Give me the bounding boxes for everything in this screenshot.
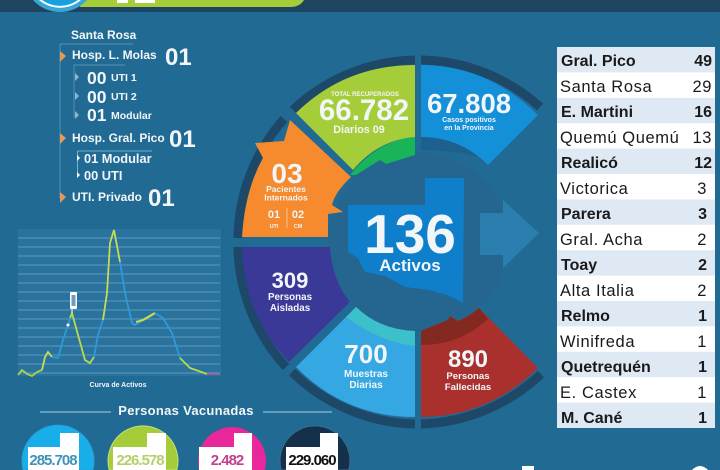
vaccine badge: 226.578: 226.578 (116, 452, 164, 469)
panel: personas aisladas (242, 247, 350, 362)
chart: curva de activos (18, 229, 221, 376)
table: casos por localidad: 2 (697, 282, 707, 300)
panel: pacientes internados: 02 (292, 209, 304, 221)
table: casos por localidad: Realicó (561, 155, 618, 172)
panel: hospital occupancy: 01 (148, 185, 175, 212)
panel: personas aisladas: 309 (272, 268, 308, 293)
vaccine badge: 2.482: 2.482 (211, 452, 244, 469)
panel: personas aisladas: Aisladas (270, 303, 311, 314)
panel: personas aisladas: Personas (268, 292, 313, 303)
table: casos por localidad: E. Martini (561, 104, 633, 121)
panel: muestras diarias: Diarias (349, 380, 383, 391)
panel: casos positivos (421, 65, 538, 165)
vaccine badge: 285.708 (22, 425, 94, 470)
panel: total recuperados: TOTAL RECUPERADOS (331, 92, 399, 98)
vaccine badge: 2.482 (198, 427, 266, 470)
panel: pacientes internados (242, 120, 351, 237)
vaccine badge: 229.060 (280, 426, 350, 470)
table: casos por localidad: Quetrequén (561, 359, 651, 376)
panel: pacientes internados: Internados (264, 192, 308, 202)
panel: hospital occupancy: UTI 1 (111, 72, 137, 84)
center map: activos: Activos (379, 256, 441, 275)
panel: pacientes internados: Pacientes (266, 184, 306, 194)
center map: activos: 136 (364, 203, 456, 265)
panel: casos positivos: 67.808 (427, 88, 511, 119)
table: casos por localidad: 12 (694, 155, 712, 172)
panel: hospital occupancy: 00 (87, 68, 107, 88)
header bar (0, 0, 720, 12)
table: casos por localidad: 49 (694, 53, 712, 70)
table: casos por localidad: 2 (698, 257, 707, 274)
ring: dark outer arcs (238, 60, 541, 424)
panel: hospital occupancy: 00 UTI (84, 168, 122, 183)
table: casos por localidad: M. Cané (561, 410, 622, 427)
table: casos por localidad: 29 (692, 78, 712, 96)
center map: activos (348, 178, 464, 303)
table: casos por localidad: 1 (697, 333, 707, 351)
panel: personas fallecidas: Personas (446, 371, 490, 382)
panel: hospital occupancy: 01 (169, 126, 196, 153)
panel: muestras diarias: 700 (344, 339, 388, 369)
table: casos por localidad: 3 (697, 180, 707, 198)
panel: muestras diarias (296, 307, 415, 417)
vaccine badge: 285.708: 285.708 (29, 452, 77, 469)
panel: hospital occupancy (60, 28, 196, 212)
panel: pacientes internados: UTI (270, 224, 279, 230)
table: casos por localidad: E. Castex (560, 384, 637, 402)
table: casos por localidad: Victorica (560, 180, 629, 198)
table: casos por localidad: 2 (697, 231, 707, 249)
panel: personas fallecidas (421, 308, 538, 417)
panel: hospital occupancy: 01 Modular (84, 151, 152, 166)
table: casos por localidad: Alta Italia (560, 282, 635, 300)
table: casos por localidad: 1 (697, 384, 707, 402)
background arrow (480, 200, 539, 268)
panel: pacientes internados: 03 (271, 158, 303, 189)
panel: hospital occupancy: UTI. Privado (72, 190, 142, 204)
panel: hospital occupancy: Santa Rosa (71, 28, 137, 42)
panel: casos positivos: Casos positivos (442, 117, 496, 124)
panel: hospital occupancy: Hosp. L. Molas (72, 48, 157, 62)
table: casos por localidad: Gral. Pico (561, 53, 636, 70)
table: casos por localidad: 1 (698, 308, 707, 325)
panel: casos positivos: en la Provincia (444, 125, 494, 132)
panel: total recuperados: Diarios 09 (333, 124, 385, 136)
heading: personas vacunadas: Personas Vacunadas (118, 403, 254, 418)
table: casos por localidad: Gral. Acha (560, 231, 643, 249)
table: casos por localidad: 1 (698, 410, 707, 427)
table: casos por localidad (557, 47, 715, 428)
chart title: Curva de Activos (90, 382, 147, 389)
table: casos por localidad: 1 (698, 359, 707, 376)
table: casos por localidad: Santa Rosa (560, 78, 652, 96)
table: casos por localidad: Parera (561, 206, 611, 223)
vaccine badge: 226.578 (108, 426, 178, 470)
panel: hospital occupancy: 00 (87, 87, 107, 107)
panel: muestras diarias: Muestras (344, 369, 388, 380)
table: casos por localidad: 3 (698, 206, 707, 223)
panel: personas fallecidas: Fallecidas (445, 382, 491, 393)
footer marks (522, 466, 708, 470)
panel: hospital occupancy: Hosp. Gral. Pico (72, 131, 165, 145)
panel: pacientes internados: CM (294, 224, 303, 230)
panel: hospital occupancy: 01 (165, 44, 192, 71)
panel: hospital occupancy: Modular (111, 110, 152, 122)
vaccine badge: 229.060: 229.060 (288, 452, 336, 469)
table: casos por localidad: Toay (561, 257, 597, 274)
panel: hospital occupancy: 01 (87, 105, 107, 125)
panel: total recuperados: 66.782 (319, 94, 409, 127)
table: casos por localidad: 16 (694, 104, 712, 121)
table: casos por localidad: Relmo (561, 308, 610, 325)
panel: hospital occupancy: UTI 2 (111, 91, 137, 103)
panel: pacientes internados: 01 (268, 209, 280, 221)
center backdrop (328, 152, 508, 332)
table: casos por localidad: Winifreda (560, 333, 635, 351)
table: casos por localidad: 13 (692, 129, 712, 147)
panel: personas fallecidas: 890 (448, 346, 488, 373)
table: casos por localidad: Quemú Quemú (560, 129, 679, 147)
panel: total recuperados (296, 65, 415, 175)
